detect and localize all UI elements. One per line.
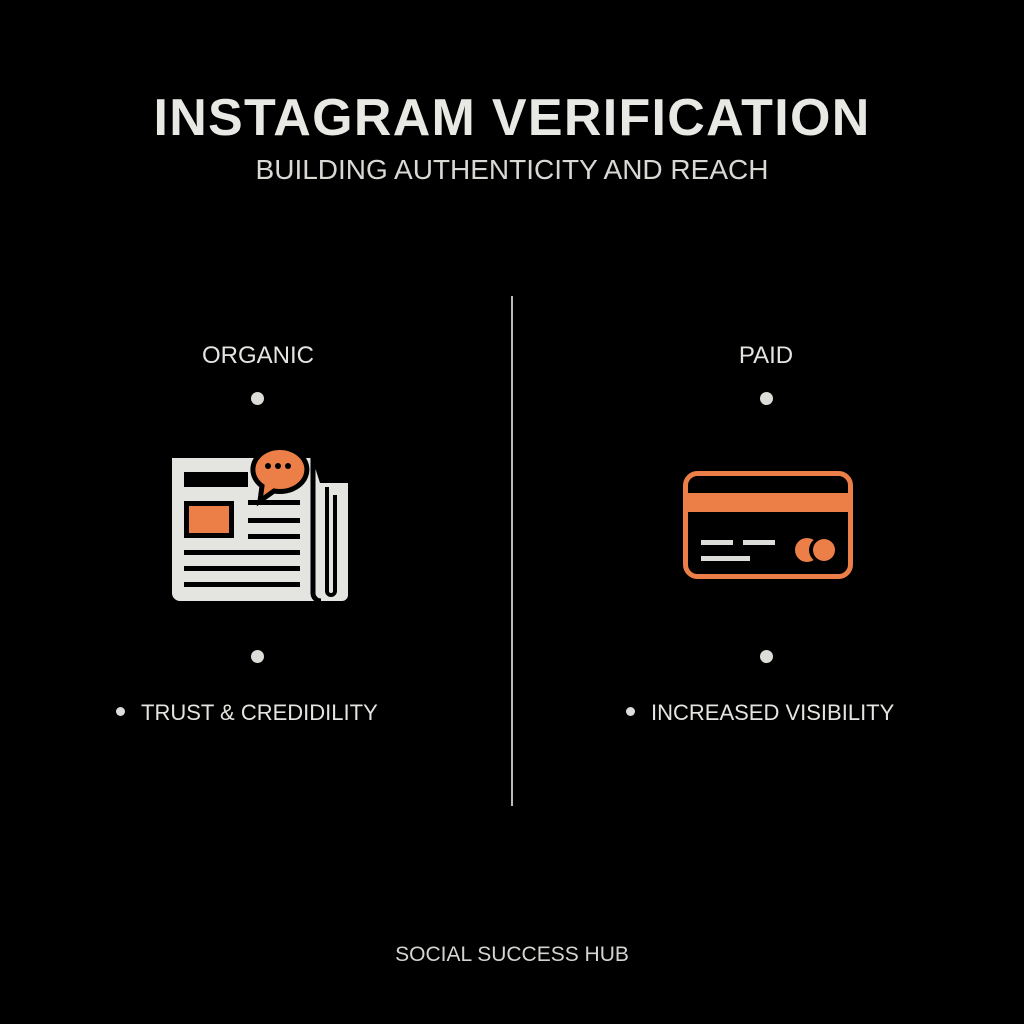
divider line [511, 296, 513, 806]
icon: credit card [683, 471, 853, 579]
dot bottom [760, 650, 773, 663]
heading: organic: ORGANIC [202, 342, 314, 369]
dot top [760, 392, 773, 405]
panel: paid [626, 342, 894, 725]
title: INSTAGRAM VERIFICATION [153, 89, 871, 147]
footer: SOCIAL SUCCESS HUB [395, 943, 629, 966]
bullet: visibility: INCREASED VISIBILITY [651, 700, 894, 725]
icon: newspaper [172, 450, 348, 601]
dot top [251, 392, 264, 405]
dot bottom [251, 650, 264, 663]
bullet: trust: TRUST & CREDIDILITY [141, 700, 378, 725]
panel: organic [116, 342, 378, 725]
heading: paid: PAID [739, 342, 793, 369]
subtitle: BUILDING AUTHENTICITY AND REACH [256, 154, 768, 185]
